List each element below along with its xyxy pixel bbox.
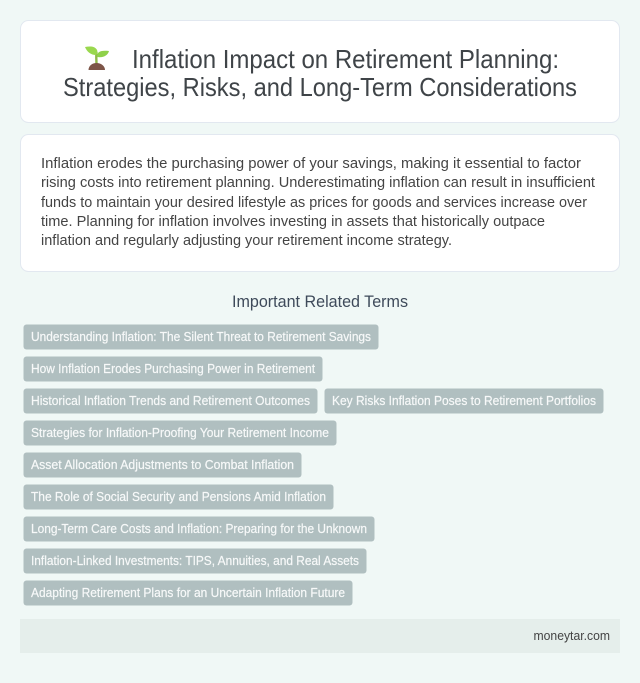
tag 7	[24, 484, 334, 510]
tag 6: Asset Allocation Adjustments to Combat Inflation	[31, 458, 294, 472]
panel: term tags	[24, 324, 604, 606]
title: Inflation Impact on Retirement Planning:	[132, 44, 559, 74]
paragraph text	[41, 155, 596, 249]
title	[63, 44, 577, 102]
tag 6	[24, 452, 302, 478]
paragraph text: funds to maintain your desired lifestyle as prices for goods and services increase over	[41, 194, 587, 211]
tag 5	[24, 420, 336, 446]
heading: related terms: Important Related Terms	[232, 293, 408, 311]
tag 10: Adapting Retirement Plans for an Uncertain Inflation Future	[31, 586, 345, 600]
paragraph text: Inflation erodes the purchasing power of your savings, making it essential to factor	[41, 155, 581, 172]
paragraph text: inflation and regularly adjusting your retirement income strategy.	[41, 232, 452, 249]
tag 7: The Role of Social Security and Pensions Amid Inflation	[31, 490, 326, 504]
tag 4: Key Risks Inflation Poses to Retirement Portfolios	[332, 394, 596, 408]
footer	[20, 619, 620, 653]
tag 5: Strategies for Inflation-Proofing Your Retirement Income	[31, 426, 329, 440]
tag 2	[24, 356, 322, 382]
title: Strategies, Risks, and Long-Term Considerations	[63, 72, 577, 102]
panel: title card	[20, 20, 620, 122]
tag 9: Inflation-Linked Investments: TIPS, Annuities, and Real Assets	[31, 554, 359, 568]
tag 8: Long-Term Care Costs and Inflation: Preparing for the Unknown	[31, 522, 367, 536]
tag 3: Historical Inflation Trends and Retirement Outcomes	[31, 394, 310, 408]
tag 1: Understanding Inflation: The Silent Threat to Retirement Savings	[31, 330, 371, 344]
tag 8	[24, 516, 374, 542]
paragraph text: rising costs into retirement planning. Underestimating inflation can result in insufficient	[41, 174, 596, 191]
tag 9	[24, 548, 366, 574]
footer: moneytar.com	[534, 629, 610, 643]
paragraph text: time. Planning for inflation involves investing in assets that historically outpace	[41, 213, 545, 230]
tag 4	[324, 388, 604, 414]
panel: intro paragraph	[20, 134, 620, 272]
icon: seedling	[85, 46, 109, 70]
tag 1	[24, 324, 378, 350]
tag 2: How Inflation Erodes Purchasing Power in Retirement	[31, 362, 315, 376]
tag 10	[24, 580, 352, 606]
tag 3	[24, 388, 318, 414]
